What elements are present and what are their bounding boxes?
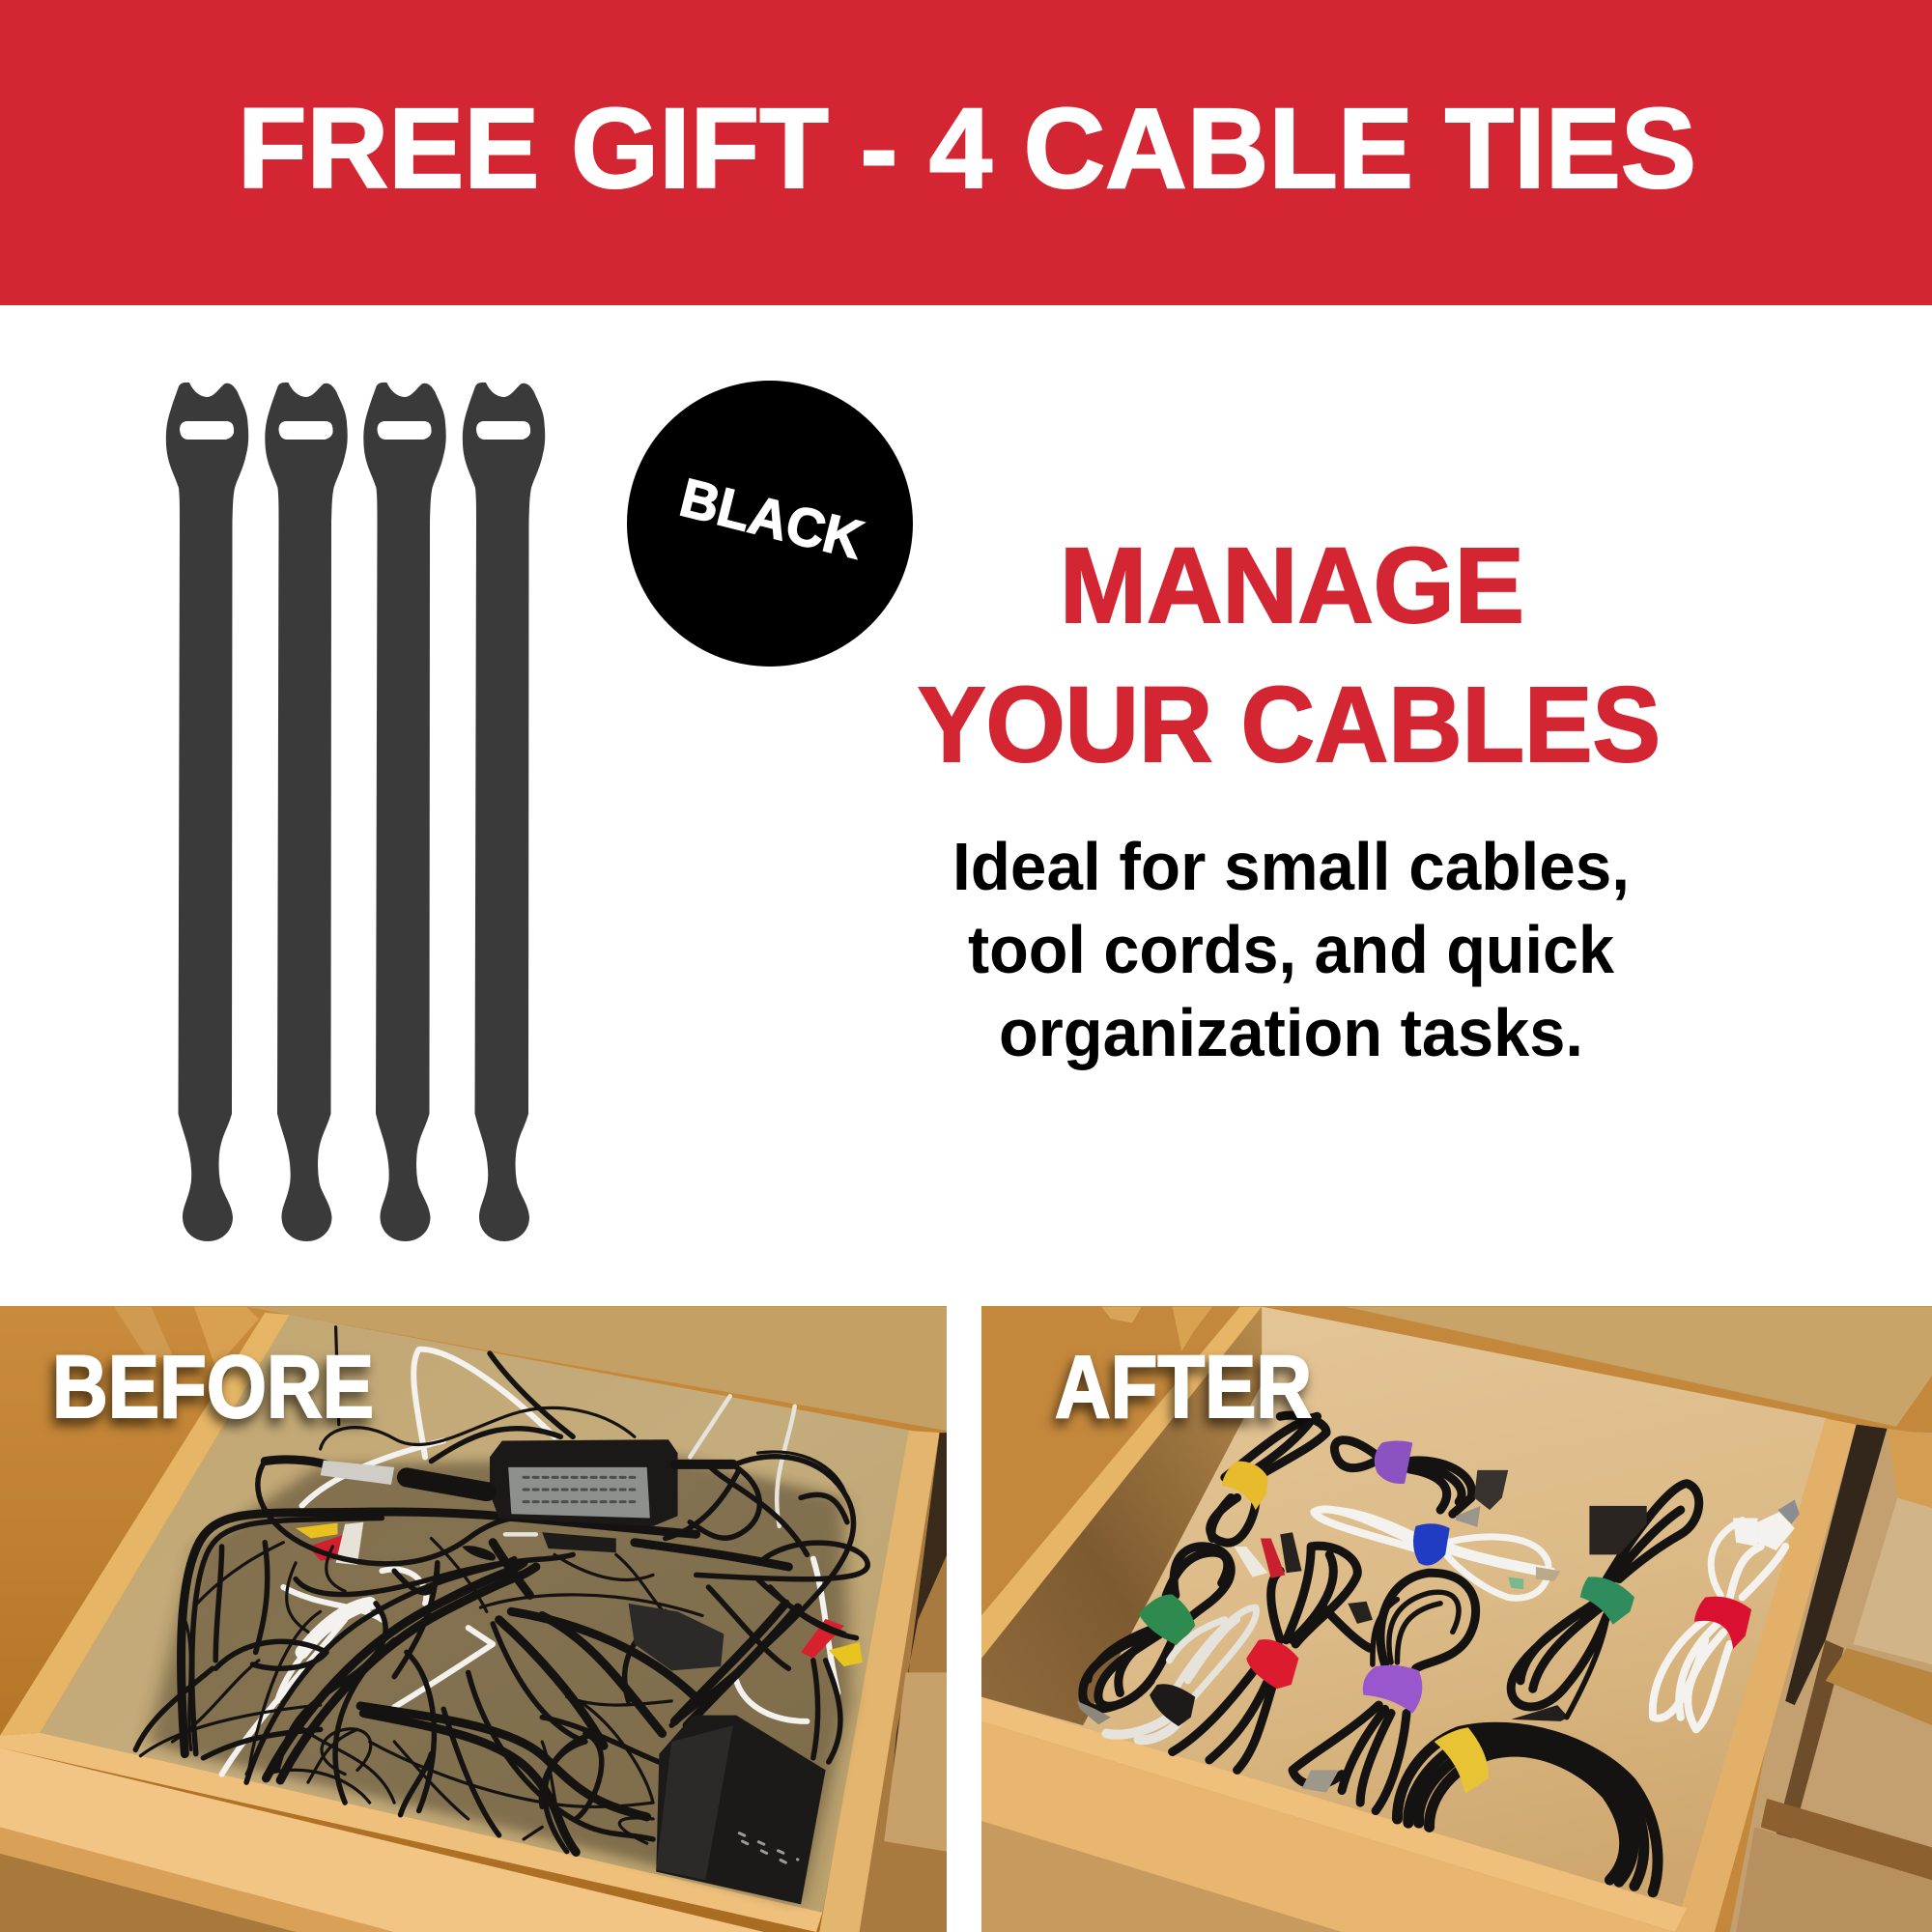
left rim bbox=[0, 1313, 290, 1736]
drawer interior bbox=[40, 1315, 912, 1913]
heading: manage your cables bbox=[918, 526, 1661, 784]
bundle: white with blue tie bbox=[1314, 1509, 1560, 1598]
tie 4 bbox=[463, 383, 545, 1241]
lower right cabinet bbox=[884, 1672, 947, 1852]
cabinet uprights bbox=[114, 1307, 259, 1368]
wall adapter bbox=[629, 1604, 724, 1670]
bundle: green tie bbox=[1077, 1547, 1231, 1724]
header title: FREE GIFT - 4 CABLE TIES bbox=[238, 85, 1696, 213]
right cabinet bbox=[1730, 1429, 1932, 1932]
badge label: BLACK bbox=[674, 467, 869, 570]
upper drawer front bbox=[246, 1307, 947, 1431]
drawer slide bbox=[1751, 1640, 1844, 1932]
power brick bbox=[321, 1439, 733, 1552]
drawer floor bbox=[981, 1307, 1828, 1909]
right cabinet shadow bbox=[860, 1433, 947, 1932]
right dark gap bbox=[893, 1433, 947, 1774]
panel: after photo bbox=[981, 1306, 1932, 1932]
bundle: purple tie bbox=[1334, 1440, 1508, 1527]
before label: BEFORE bbox=[52, 1338, 374, 1436]
front face bbox=[981, 1721, 1674, 1932]
heading: manage your cables: YOUR CABLES bbox=[918, 666, 1661, 784]
bundle: green tie right bbox=[1511, 1484, 1699, 1718]
messy drawer illustration bbox=[0, 1307, 947, 1932]
panel: before photo bbox=[0, 1306, 947, 1932]
front rim inner bbox=[0, 1733, 822, 1932]
tie 2 bbox=[265, 383, 348, 1241]
dark gap bbox=[1785, 1425, 1887, 1705]
front face bbox=[0, 1747, 764, 1932]
left rim bbox=[981, 1307, 1262, 1659]
rca plugs bbox=[296, 1522, 863, 1666]
bundle: white with black tie bbox=[1106, 1607, 1256, 1740]
tie 1 bbox=[166, 383, 248, 1241]
cabinet below bbox=[0, 1854, 296, 1932]
front shadow strip bbox=[0, 1827, 394, 1932]
coiled cable with yellow tie bbox=[1397, 1705, 1658, 1892]
inner left wall bbox=[981, 1307, 1262, 1725]
bundle: purple tie lower bbox=[1293, 1573, 1476, 1811]
right rim bbox=[1674, 1418, 1857, 1932]
description text: tool cords, and quick bbox=[968, 912, 1614, 987]
description text: Ideal for small cables, bbox=[952, 829, 1630, 904]
bundle: white with red tie bbox=[1653, 1500, 1800, 1729]
description text: organization tasks. bbox=[999, 995, 1583, 1070]
tie 3 bbox=[363, 383, 446, 1241]
right cabinet panels bbox=[1736, 1429, 1932, 1932]
after label: AFTER bbox=[1055, 1338, 1312, 1436]
black colour badge bbox=[627, 381, 913, 667]
four black cable ties bbox=[166, 383, 545, 1241]
tangle shadow bbox=[148, 1457, 850, 1904]
description text bbox=[952, 829, 1630, 1070]
cabinet below bbox=[981, 1821, 1342, 1932]
heading: manage your cables: MANAGE bbox=[1060, 526, 1524, 645]
cable tangle bbox=[135, 1327, 867, 1904]
front rim bbox=[981, 1697, 1687, 1932]
right rim bbox=[819, 1431, 940, 1932]
upper drawer front bbox=[1345, 1307, 1932, 1427]
header banner bbox=[0, 0, 1932, 305]
bundle: red tie bbox=[1173, 1532, 1373, 1770]
white cables bbox=[222, 1350, 838, 1775]
router box bbox=[656, 1716, 826, 1904]
tidy drawer illustration bbox=[981, 1307, 1932, 1932]
bundle: yellow tie bbox=[1210, 1415, 1326, 1543]
black cables bbox=[135, 1327, 867, 1852]
cabinet details bbox=[1101, 1307, 1212, 1351]
